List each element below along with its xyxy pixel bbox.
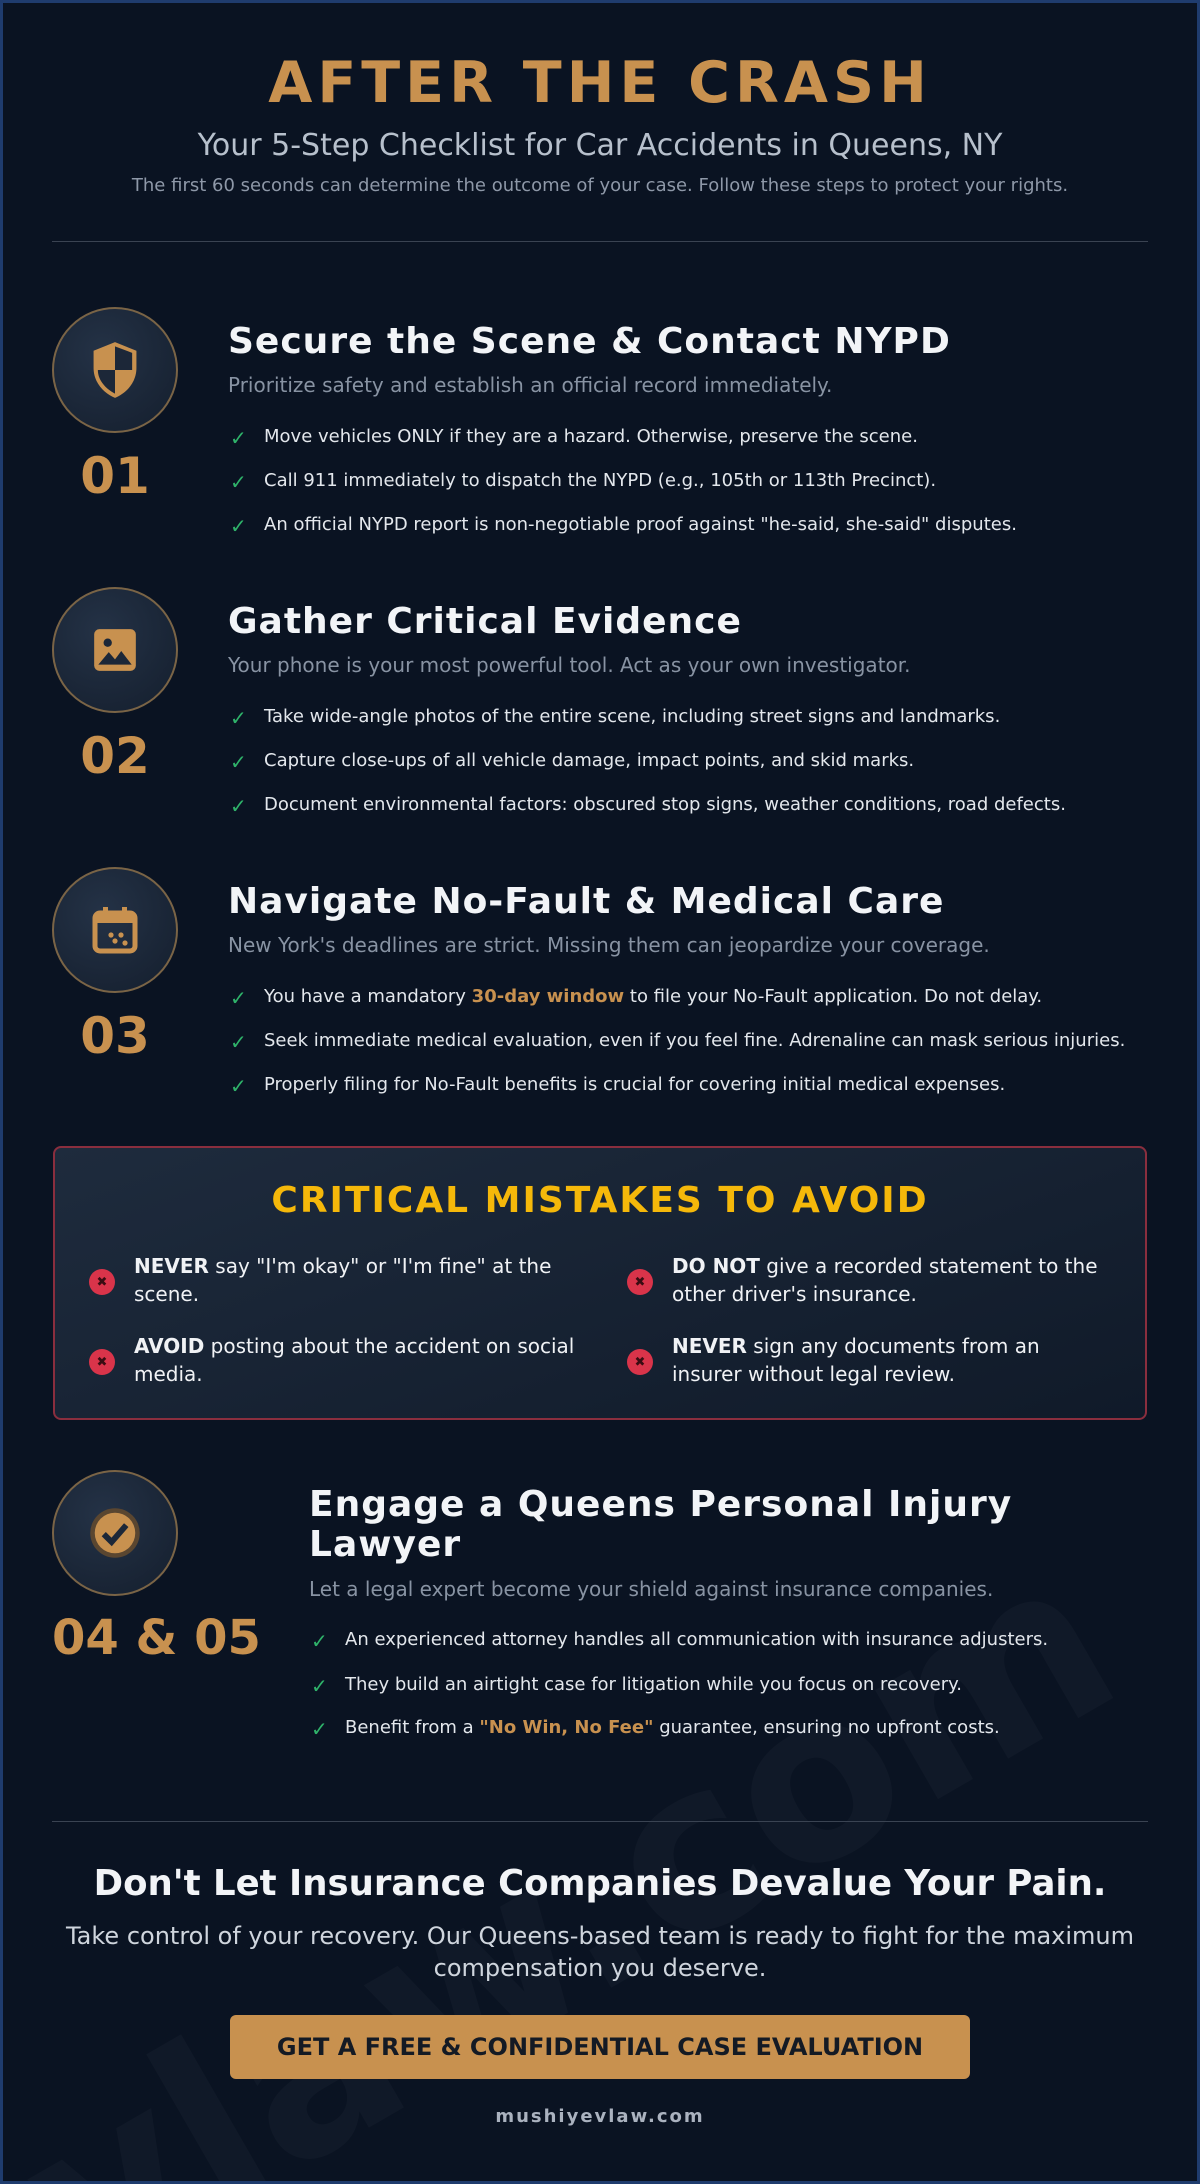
tagline: The first 60 seconds can determine the outcome of your case. Follow these steps to protect your rights. [132, 175, 1068, 196]
bullets: Call 911 immediately to dispatch the NYPD (e.g., 105th or 113th Precinct). [264, 470, 936, 491]
icon: shield [52, 307, 178, 433]
step 2 [52, 587, 1066, 818]
step 2: ✓ [230, 706, 247, 730]
title: AFTER THE CRASH [268, 50, 932, 116]
icon: calendar [52, 867, 178, 993]
step 4 & 5: ✓ [311, 1717, 328, 1741]
cta heading: Don't Let Insurance Companies Devalue Your Pain. [94, 1863, 1106, 1904]
icon: image [52, 587, 178, 713]
subheading: Prioritize safety and establish an official record immediately. [228, 373, 832, 397]
mistake 1: NEVER say "I'm okay" or "I'm fine" at the scene. [134, 1254, 551, 1306]
bullets: Properly filing for No-Fault benefits is crucial for covering initial medical expenses. [264, 1074, 1005, 1095]
step 2: ✓ [230, 750, 247, 774]
step 4 & 5 [52, 1470, 1048, 1741]
step number 03: 03 [80, 1007, 150, 1065]
bullets: Document environmental factors: obscured stop signs, weather conditions, road defects. [264, 794, 1066, 815]
mistake 2: DO NOT give a recorded statement to the other driver's insurance. [672, 1254, 1098, 1306]
bullets [311, 1629, 1048, 1741]
step 1: ✓ [230, 470, 247, 494]
bullets [230, 426, 1017, 538]
bullets: Capture close-ups of all vehicle damage, impact points, and skid marks. [264, 750, 914, 771]
bullets: An official NYPD report is non-negotiable proof against "he-said, she-said" disputes. [264, 514, 1017, 535]
step number 04 & 05: 04 & 05 [52, 1610, 261, 1666]
step number 02: 02 [80, 727, 150, 785]
heading: Engage a Queens Personal Injury Lawyer [309, 1484, 1012, 1565]
cta button: GET A FREE & CONFIDENTIAL CASE EVALUATION [277, 2033, 923, 2061]
mistake 3: ✖ [97, 1354, 107, 1370]
step 3: ✓ [230, 1030, 247, 1054]
subheading: Your phone is your most powerful tool. Act as your own investigator. [228, 653, 911, 677]
step 2: ✓ [230, 794, 247, 818]
bullets: An experienced attorney handles all communication with insurance adjusters. [345, 1629, 1048, 1650]
step 4 & 5: ✓ [311, 1674, 328, 1698]
mistake 1: ✖ [97, 1274, 107, 1290]
step 4 & 5: ✓ [311, 1629, 328, 1653]
heading: Navigate No-Fault & Medical Care [228, 881, 944, 922]
step 1 [52, 307, 1017, 538]
panel: critical mistakes [53, 1146, 1147, 1420]
bullets: Move vehicles ONLY if they are a hazard. Otherwise, preserve the scene. [264, 426, 918, 447]
heading: Gather Critical Evidence [228, 601, 742, 642]
step 3: ✓ [230, 1074, 247, 1098]
mistake 3: AVOID posting about the accident on social media. [134, 1334, 574, 1386]
step 1: ✓ [230, 426, 247, 450]
heading: critical mistakes: CRITICAL MISTAKES TO AVOID [271, 1180, 929, 1221]
icon: check badge [52, 1470, 178, 1596]
heading: Secure the Scene & Contact NYPD [228, 321, 951, 362]
cta paragraph: Take control of your recovery. Our Queens-based team is ready to fight for the maximum compensation you deserve. [66, 1922, 1134, 1982]
bullets: Benefit from a "No Win, No Fee" guarantee, ensuring no upfront costs. [345, 1717, 1000, 1738]
step 3 [52, 867, 1125, 1098]
mistake 4: ✖ [635, 1354, 645, 1370]
step 3: ✓ [230, 986, 247, 1010]
bullets [230, 986, 1125, 1098]
bullets: They build an airtight case for litigation while you focus on recovery. [345, 1674, 962, 1695]
cta button [230, 2015, 970, 2079]
step 1: ✓ [230, 514, 247, 538]
bullets: Seek immediate medical evaluation, even if you feel fine. Adrenaline can mask serious injuries. [264, 1030, 1125, 1051]
mistake 2: ✖ [635, 1274, 645, 1290]
subheading: New York's deadlines are strict. Missing them can jeopardize your coverage. [228, 933, 990, 957]
subtitle: Your 5-Step Checklist for Car Accidents in Queens, NY [198, 128, 1002, 163]
step number 01: 01 [80, 447, 150, 505]
website url: mushiyevlaw.com [495, 2106, 705, 2127]
bullets [230, 706, 1066, 818]
mistake 4: NEVER sign any documents from an insurer without legal review. [672, 1334, 1040, 1386]
subheading: Let a legal expert become your shield against insurance companies. [309, 1577, 993, 1601]
bullets: Take wide-angle photos of the entire scene, including street signs and landmarks. [264, 706, 1000, 727]
bullets: You have a mandatory 30-day window to file your No-Fault application. Do not delay. [264, 986, 1042, 1007]
